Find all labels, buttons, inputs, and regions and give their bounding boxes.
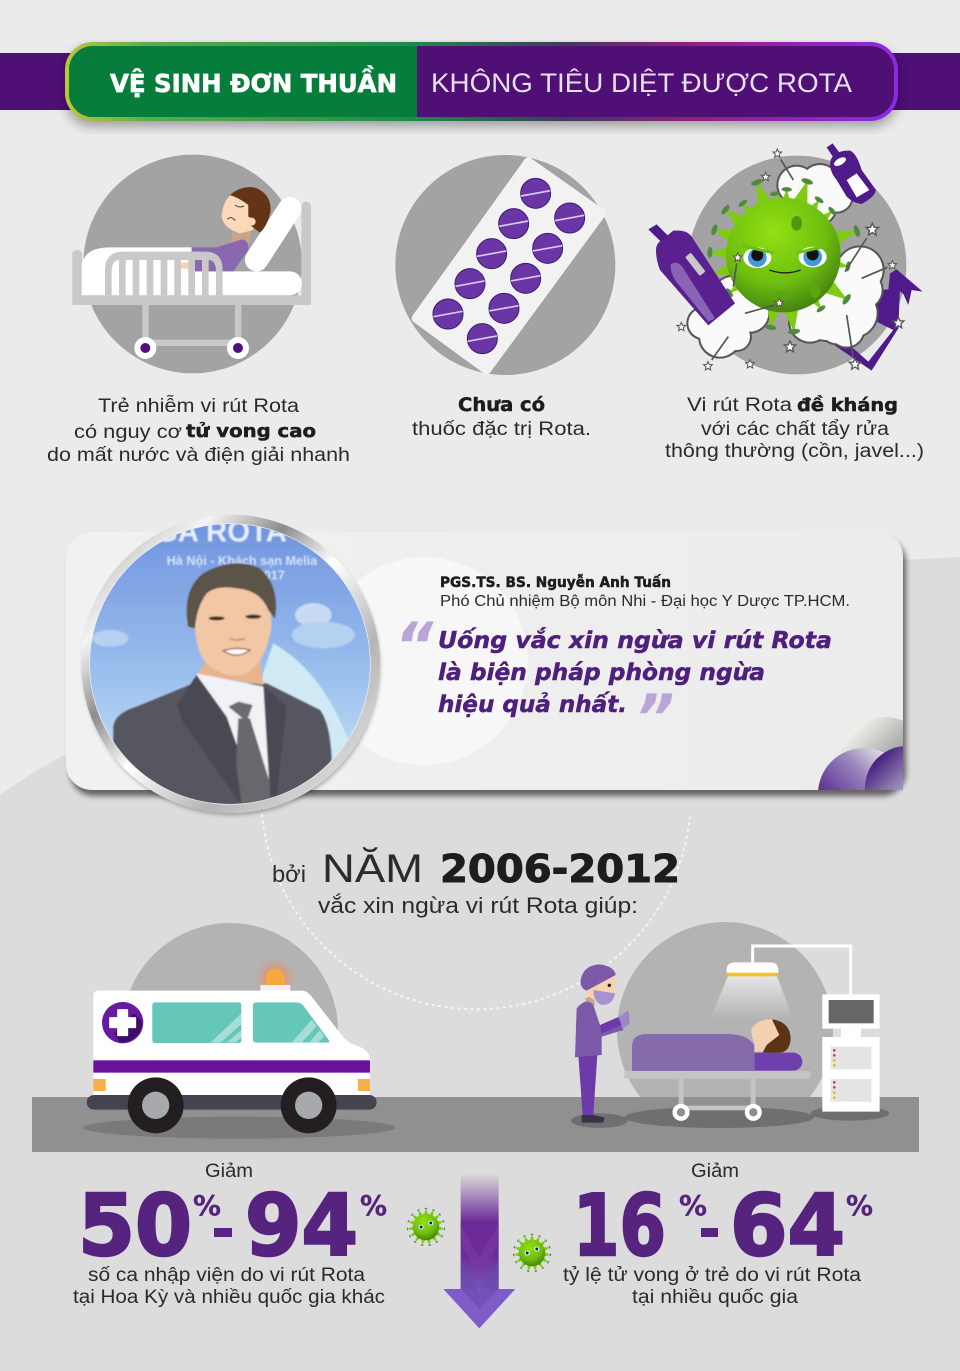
text: no treatment: Chưa có — [458, 394, 545, 416]
portrait in chrome ring: GA ROTA — [155, 516, 287, 549]
clouds — [686, 163, 885, 359]
doctor — [575, 964, 630, 1123]
icon: patient in hospital bed — [72, 155, 311, 373]
speaker title: Phó Chủ nhiệm Bộ môn Nhi - Đại học Y Dược TP.HCM. — [440, 593, 850, 610]
dotted arc — [262, 815, 690, 1009]
stat: mortality reduction: tỷ lệ tử vong ở trẻ do vi rút Rota — [563, 1265, 861, 1286]
text: no treatment — [412, 394, 591, 440]
stat: mortality reduction: % — [679, 1189, 707, 1222]
stat: mortality reduction: 64 — [730, 1177, 845, 1276]
panel: patient in bed — [47, 155, 350, 466]
quote text: là biện pháp phòng ngừa — [438, 660, 765, 686]
text: resistant virus: thông thường (cồn, javel...) — [665, 441, 924, 462]
text: patient: tử vong cao — [186, 421, 316, 442]
panel: resistant virus — [648, 143, 924, 462]
lower background shape — [0, 557, 960, 1371]
icon: doctor and patient on gurney — [571, 946, 889, 1128]
stars — [677, 149, 904, 370]
patient — [632, 1019, 802, 1071]
arrow down — [443, 1173, 515, 1328]
icon: blister pack of pills — [395, 155, 615, 375]
portrait in chrome ring: Hà Nội - Khách sạn Melia — [167, 554, 318, 568]
heading right: KHÔNG TIÊU DIỆT ĐƯỢC ROTA — [431, 67, 852, 98]
text: patient: Trẻ nhiễm vi rút Rota — [98, 395, 299, 417]
text: resistant virus: đề kháng — [797, 395, 898, 416]
text: patient — [47, 395, 350, 466]
stat: hospitalisation reduction — [73, 1161, 387, 1308]
text: resistant virus: Vi rút Rota — [687, 395, 793, 416]
quote text: hiệu quả nhất. — [438, 691, 627, 718]
light circle — [320, 557, 528, 765]
stat: hospitalisation reduction: tại Hoa Kỳ và nhiều quốc gia khác — [73, 1287, 385, 1308]
stat: hospitalisation reduction: % — [193, 1189, 221, 1222]
stat: hospitalisation reduction: 94 — [245, 1177, 358, 1276]
panel: expert quote — [66, 514, 910, 818]
quote text: Uống vắc xin ngừa vi rút Rota — [438, 627, 832, 654]
heading left: VỆ SINH ĐƠN THUẦN — [110, 65, 397, 98]
text: resistant virus — [665, 395, 924, 462]
shadows — [571, 1106, 889, 1128]
spray bottle — [833, 269, 923, 371]
text: no treatment: thuốc đặc trị Rota. — [412, 419, 591, 440]
icon: ambulance — [83, 958, 395, 1139]
stat: mortality reduction: % — [846, 1189, 873, 1222]
stat: hospitalisation reduction: số ca nhập viện do vi rút Rota — [88, 1265, 365, 1286]
portrait in chrome ring — [81, 515, 380, 815]
quote text — [438, 627, 832, 718]
section heading: NĂM — [322, 846, 423, 891]
stat: mortality reduction: tại nhiều quốc gia — [632, 1287, 798, 1308]
text: resistant virus: với các chất tẩy rửa — [701, 419, 889, 440]
stat: mortality reduction — [563, 1161, 873, 1308]
stat: mortality reduction: Giảm — [691, 1161, 739, 1182]
section heading: 2006-2012 — [440, 847, 680, 891]
lamp — [710, 946, 851, 1020]
corner decoration — [818, 717, 903, 790]
bottle top right — [827, 143, 876, 204]
ground — [32, 1097, 919, 1152]
stat: hospitalisation reduction: % — [360, 1189, 387, 1222]
icon: small virus left — [407, 1208, 445, 1246]
stat: hospitalisation reduction: 50 — [78, 1177, 192, 1276]
section heading — [272, 846, 680, 918]
bottle left — [648, 224, 735, 325]
text: patient: do mất nước và điện giải nhanh — [47, 445, 350, 466]
text: patient: có nguy cơ — [74, 422, 182, 443]
monitor — [822, 994, 880, 1112]
stat: mortality reduction: 16 — [573, 1177, 666, 1276]
section heading: bởi — [272, 861, 306, 887]
portrait in chrome ring: 2017 — [257, 568, 285, 582]
virus — [707, 176, 862, 336]
icon: small virus right — [513, 1234, 551, 1272]
quote card — [66, 532, 903, 790]
panel: no treatment — [395, 155, 615, 440]
icon: green virus with cleaning products — [648, 143, 923, 374]
section heading: vắc xin ngừa vi rút Rota giúp: — [318, 893, 638, 918]
opening quote mark: “ — [395, 609, 434, 682]
closing quote mark: ” — [636, 681, 674, 754]
stat: hospitalisation reduction: Giảm — [205, 1161, 253, 1182]
speaker name: PGS.TS. BS. Nguyễn Anh Tuấn — [440, 574, 671, 591]
gurney — [624, 1071, 810, 1119]
header banner — [0, 44, 960, 126]
grey circles behind illustrations — [122, 922, 833, 1139]
